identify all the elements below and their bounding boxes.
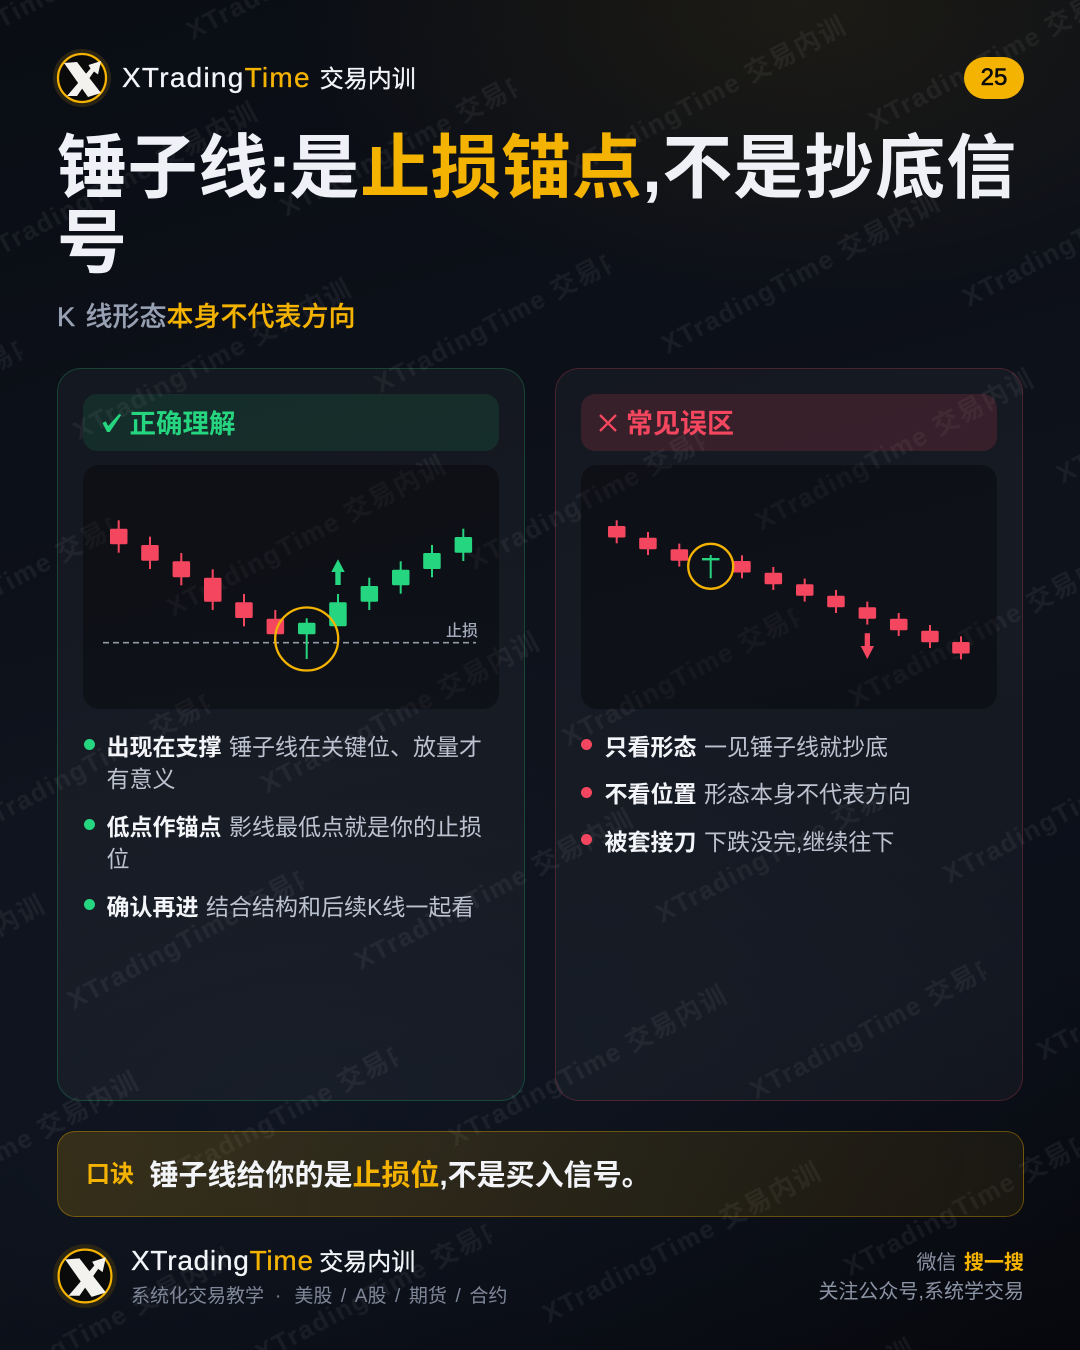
title xyxy=(57,129,1017,282)
down arrow xyxy=(860,633,874,658)
page number badge xyxy=(964,57,1024,99)
bullet: support xyxy=(84,734,482,920)
header brand name: XTradingTime 交易内训 xyxy=(122,62,416,93)
callout text: 锤子线给你的是止损位,不是买入信号。 xyxy=(150,1160,651,1192)
bullet: ignore position xyxy=(581,786,592,798)
bullet: confirm xyxy=(84,898,94,910)
bullet: shape only: 被套接刀 下跌没完,继续往下 xyxy=(604,828,894,854)
bullet: anchor xyxy=(84,818,94,830)
footer right: follow: 关注公众号,系统学交易 xyxy=(818,1281,1024,1303)
highlight circle xyxy=(275,607,338,670)
chart: hammer in downtrend xyxy=(580,464,996,708)
stop-loss label: 止损 xyxy=(446,622,478,640)
up arrow xyxy=(331,559,344,584)
bullet: shape only: 只看形态 一见锤子线就抄底 xyxy=(604,734,888,760)
title: 号 xyxy=(57,204,128,282)
icon: check mark xyxy=(102,414,122,432)
chart: hammer at support xyxy=(82,464,498,708)
page number badge: 25 xyxy=(981,64,1007,91)
bullet: trapped xyxy=(581,834,592,845)
falling red candles xyxy=(110,520,284,642)
panel heading: mistakes xyxy=(580,394,996,451)
falling red candles xyxy=(608,520,969,659)
highlight circle xyxy=(688,543,733,588)
panel: common mistakes xyxy=(555,368,1023,1101)
footer brand name: XTradingTime 交易内训 xyxy=(131,1245,415,1276)
heading text: 正确理解 xyxy=(130,409,236,439)
callout label: 口诀 xyxy=(86,1161,134,1188)
icon: cross xyxy=(599,414,617,432)
callout: mnemonic xyxy=(57,1131,1024,1217)
footer tagline: 系统化交易教学 · 美股 / A股 / 期货 / 合约 xyxy=(131,1286,507,1307)
subtitle: K 线形态本身不代表方向 xyxy=(57,302,356,332)
heading text: 常见误区 xyxy=(626,409,734,439)
bullet: support: 低点作锚点 影线最低点就是你的止损位 xyxy=(106,814,482,872)
bullet: shape only: 不看位置 形态本身不代表方向 xyxy=(604,781,911,807)
panel: correct understanding xyxy=(57,368,525,1101)
bullet: support: 出现在支撑 锤子线在关键位、放量才有意义 xyxy=(106,734,482,792)
stop-loss dashed line xyxy=(102,641,476,643)
bullet: support: 确认再进 结合结构和后续K线一起看 xyxy=(106,894,474,920)
panel heading: correct xyxy=(82,394,498,451)
rising green candles xyxy=(298,528,472,658)
title: 锤子线:是止损锚点,不是抄底信 xyxy=(57,129,1017,207)
bullet: shape only xyxy=(581,734,911,854)
header logo xyxy=(53,49,111,107)
footer logo xyxy=(53,1244,117,1308)
green T candle xyxy=(702,554,719,578)
footer right: search: 微信 搜一搜 xyxy=(916,1252,1024,1274)
